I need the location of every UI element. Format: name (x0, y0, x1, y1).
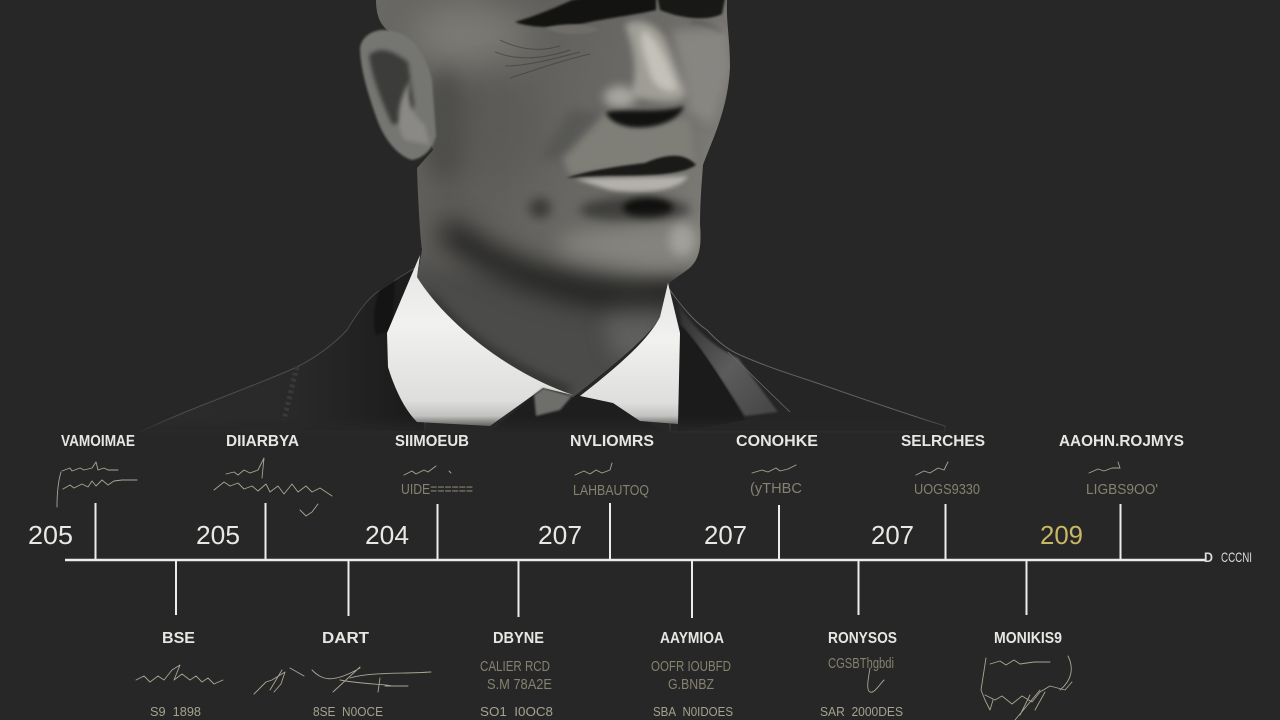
note: fourth milestone: LAHBAUTOQ (573, 482, 649, 499)
upper headings (61, 433, 1184, 450)
upper notes (57, 458, 1158, 516)
bottom fade (130, 416, 960, 434)
note: fifth milestone: (yTHBC (750, 480, 802, 497)
lower headings (162, 630, 1062, 647)
lower ticks (176, 561, 1026, 618)
philtrum plane (562, 112, 694, 176)
year labels: 205 (28, 520, 73, 550)
lower headings: DART (322, 630, 369, 647)
note: DBYNE details (480, 658, 552, 693)
lower headings: BSE (162, 630, 195, 647)
brow and eye shadow (515, 0, 656, 27)
right cheek (672, 30, 730, 125)
mouth (566, 156, 696, 178)
upper headings: SELRCHES (901, 433, 985, 450)
note: third milestone (401, 466, 473, 498)
upper headings: CONOHKE (736, 433, 818, 450)
note: AAYMIOA details: G.BNBZ (668, 676, 714, 693)
note: RONYSOS signature (828, 655, 894, 692)
lower headings: MONIKIS9 (994, 630, 1062, 647)
year labels: 204 (365, 520, 409, 550)
tie knot (534, 388, 572, 416)
note: third milestone: UIDE====== (401, 481, 473, 498)
year labels (28, 520, 1083, 550)
year labels: 207 (704, 520, 747, 550)
note: seventh milestone: LIGBS9OO' (1086, 481, 1158, 498)
axis end label: D (1204, 549, 1213, 565)
ear (360, 30, 436, 160)
jaw shadow (445, 228, 695, 295)
note: AAYMIOA details: OOFR IOUBFD (651, 658, 731, 675)
timeline axis (65, 559, 1205, 561)
suit jacket (140, 262, 945, 432)
year labels: 207 (871, 520, 914, 550)
upper headings: NVLIOMRS (570, 433, 654, 450)
neck and face (360, 0, 740, 410)
note: second milestone (214, 458, 332, 516)
note: DBYNE details: S.M 78A2E (487, 676, 552, 693)
bottom labels: S9 1898 (150, 704, 201, 719)
lower headings: DBYNE (493, 630, 544, 647)
note: RONYSOS signature: CGSBThgbdi (828, 655, 894, 672)
note: fourth milestone (573, 463, 649, 499)
year labels: 207 (538, 520, 582, 550)
note: BSE signature (136, 665, 223, 684)
upper headings: DIIARBYA (226, 433, 299, 450)
bottom labels: SAR 2000DES (820, 704, 903, 719)
note: MONIKIS9 signature (981, 656, 1072, 720)
bottom labels (150, 704, 903, 719)
note: AAYMIOA details (651, 658, 731, 693)
bottom labels: SBA N0IDOES (653, 704, 733, 719)
year labels: 209 (1040, 520, 1083, 550)
note: fifth milestone (750, 465, 802, 497)
note: sixth milestone (914, 462, 980, 498)
bottom labels: SO1 I0OC8 (480, 704, 553, 719)
year labels: 205 (196, 520, 240, 550)
note: first milestone (57, 462, 137, 507)
note: sixth milestone: UOGS9330 (914, 481, 980, 498)
lower lip highlight (575, 176, 688, 192)
shirt collar (387, 255, 680, 426)
lower headings: AAYMIOA (660, 630, 724, 647)
upper headings: AAOHN.ROJMYS (1059, 433, 1184, 450)
axis end label: CCCNI (1221, 549, 1252, 565)
upper headings: VAMOIMAE (61, 433, 135, 450)
cheek and lower lip shade (580, 197, 690, 223)
note: DART signature (254, 667, 431, 694)
chin (560, 222, 705, 268)
crow's feet wrinkles (495, 40, 590, 78)
bottom labels: 8SE N0OCE (313, 704, 383, 719)
lower notes (136, 655, 1072, 720)
upper headings: SIIMOEUB (395, 433, 469, 450)
upper ticks (96, 503, 1120, 559)
nose (625, 21, 686, 102)
nostril shadow (606, 106, 684, 128)
lower headings: RONYSOS (828, 630, 897, 647)
portrait of man in dark suit (130, 0, 960, 434)
neck tone (417, 264, 672, 397)
temple light (410, 0, 530, 70)
axis end label (1204, 549, 1252, 565)
note: DBYNE details: CALIER RCD (480, 658, 550, 675)
timeline (28, 433, 1252, 720)
note: seventh milestone (1086, 462, 1158, 498)
